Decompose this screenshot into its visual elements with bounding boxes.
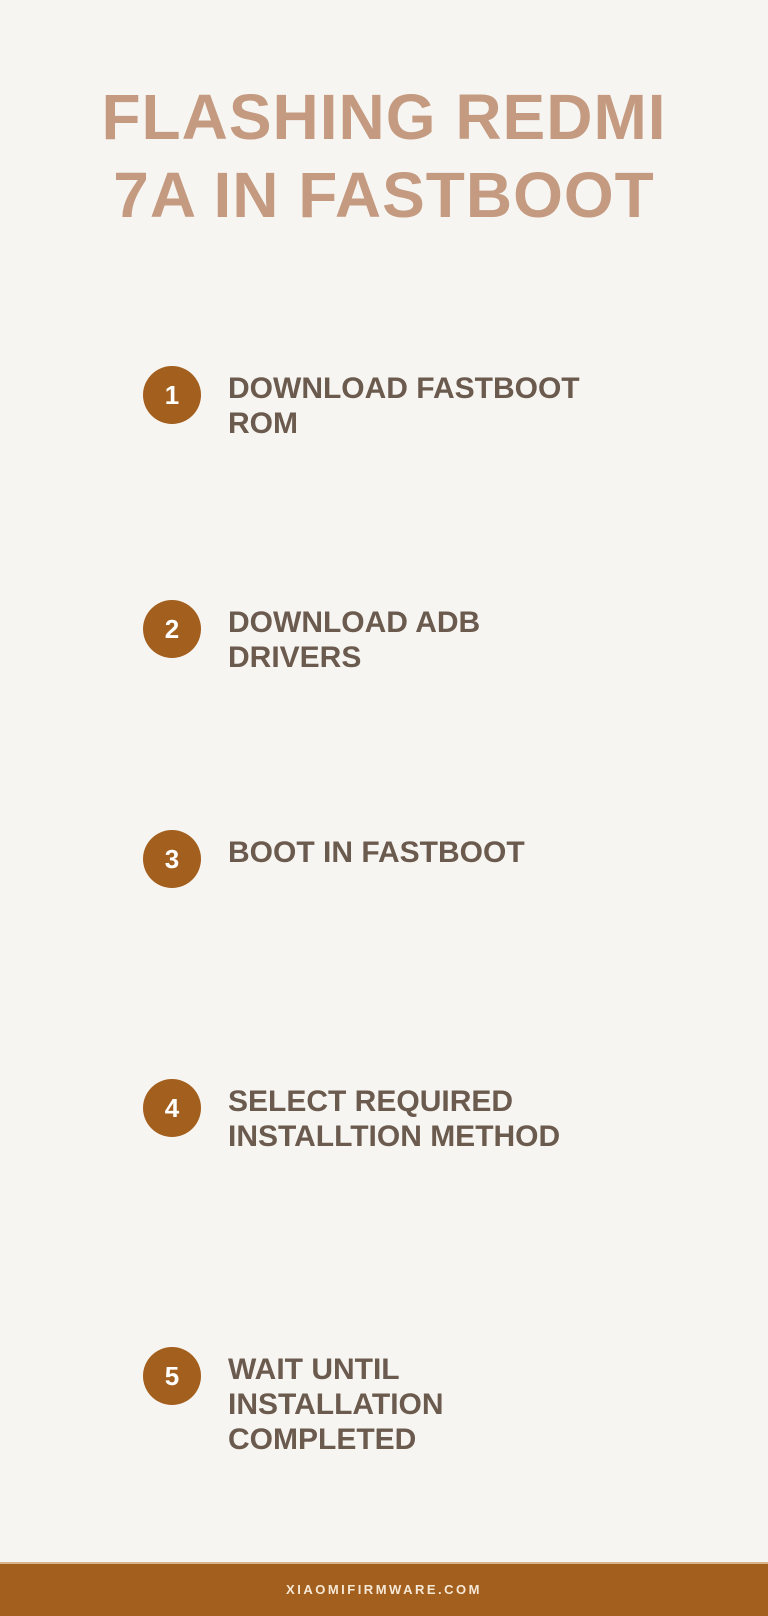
step 1: DOWNLOAD FASTBOOT bbox=[228, 372, 580, 405]
step 1: ROM bbox=[228, 407, 298, 440]
step 4 bbox=[143, 1079, 560, 1153]
step 5: 5 bbox=[165, 1361, 179, 1391]
title: 7A IN FASTBOOT bbox=[113, 159, 655, 231]
step 4: SELECT REQUIRED bbox=[228, 1085, 513, 1118]
step 2: 2 bbox=[165, 614, 179, 644]
step 3: BOOT IN FASTBOOT bbox=[228, 836, 525, 869]
step 2: DOWNLOAD ADB bbox=[228, 606, 480, 639]
step 5: WAIT UNTIL bbox=[228, 1353, 400, 1386]
step 5 bbox=[143, 1347, 444, 1456]
step 3: 3 bbox=[165, 844, 179, 874]
step 4: 4 bbox=[165, 1093, 179, 1123]
step 1: 1 bbox=[165, 380, 179, 410]
step 5: INSTALLATION bbox=[228, 1388, 444, 1421]
step 2: DRIVERS bbox=[228, 641, 361, 674]
step 2 bbox=[143, 600, 480, 674]
text: COMPLETED bbox=[228, 1423, 416, 1456]
title: FLASHING REDMI bbox=[101, 81, 667, 153]
step 4: INSTALLTION METHOD bbox=[228, 1120, 560, 1153]
step 1 bbox=[143, 366, 580, 440]
step 3 bbox=[143, 830, 525, 888]
footer bbox=[0, 1562, 768, 1616]
footer: XIAOMIFIRMWARE.COM bbox=[286, 1582, 482, 1597]
title bbox=[101, 81, 667, 231]
